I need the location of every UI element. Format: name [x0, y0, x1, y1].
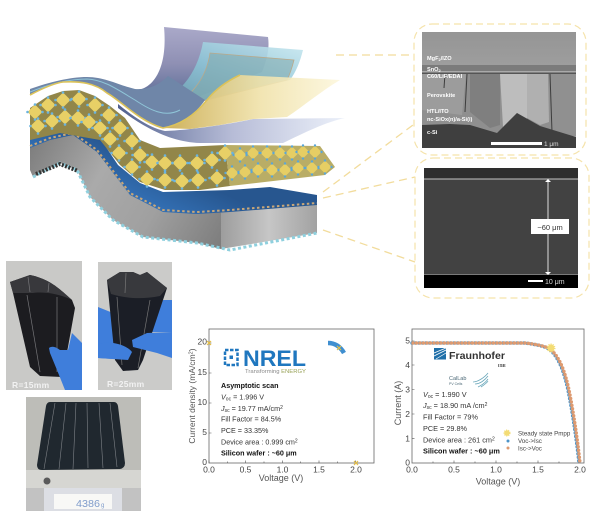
y axis labels: 5 — [405, 336, 410, 346]
layer labels: 2 — [438, 68, 442, 73]
dashed frame — [415, 158, 589, 298]
legend: Isc->Voc — [518, 446, 542, 452]
photo: wafer on weighing scale — [26, 397, 141, 511]
x axis labels: 0.0 — [406, 464, 418, 474]
measurement text — [220, 381, 298, 458]
busbars — [44, 403, 117, 469]
x axis labels: 0.5 — [240, 464, 252, 474]
layer labels: HTL/ITO — [427, 109, 449, 115]
legend: Voc->Isc — [518, 438, 542, 445]
silicon wafer end section — [221, 203, 317, 249]
thickness label: ~60 μm — [537, 223, 563, 232]
measurement text: 2 — [280, 405, 283, 411]
measurement text: PCE = 33.35% — [221, 426, 269, 435]
silicon rear textured edge — [36, 164, 78, 174]
Fraunhofer logo: ISE — [498, 363, 507, 369]
thickness arrow — [547, 180, 549, 274]
Fraunhofer logo: Fraunhofer — [449, 351, 505, 362]
chart: NREL current density vs voltage — [187, 329, 374, 483]
CalLab logo: PV Cells — [449, 382, 463, 386]
y axis labels: 2 — [405, 409, 410, 419]
ticks — [412, 341, 559, 463]
sheet: pale blue layer — [118, 104, 345, 143]
measurement text: sc — [225, 408, 230, 414]
sheet: purple top layer — [135, 27, 269, 100]
sheet: inner teal framed layer — [168, 53, 294, 108]
y axis labels: 1 — [405, 434, 410, 444]
sheet: yellow outline ribbon — [30, 75, 240, 128]
silicon bottom zigzag edge — [33, 163, 317, 250]
x axis labels — [406, 464, 586, 474]
measurement text: sc — [427, 405, 432, 411]
sheet: curved interlayers on the left — [30, 76, 205, 128]
measurement text: = 19.77 mA/cm — [230, 404, 280, 413]
measurement text: = 18.90 mA /cm — [432, 401, 485, 410]
sheet: yellow layer — [163, 75, 340, 129]
sheet: cyan layer — [150, 42, 303, 104]
x axis labels: 1.5 — [313, 464, 325, 474]
data trace — [328, 343, 344, 353]
measurement text: oc — [428, 394, 434, 400]
CalLab logo: CalLab — [449, 376, 466, 382]
NREL logo: Transforming ENERGY — [245, 369, 306, 375]
legend — [504, 430, 571, 452]
x axis title: Voltage (V) — [259, 473, 303, 483]
measurement text: J — [422, 401, 427, 410]
x axis labels: 1.0 — [490, 464, 502, 474]
y axis labels: 3 — [405, 384, 410, 394]
measurement text: oc — [226, 396, 232, 402]
y axis labels — [405, 336, 410, 468]
perovskite lattice backing right — [225, 145, 335, 186]
busbars — [117, 273, 150, 368]
bent wafer — [107, 272, 167, 371]
x axis labels: 2.0 — [350, 464, 362, 474]
display unit: g — [101, 503, 104, 509]
y axis labels — [198, 336, 207, 467]
Fraunhofer logo — [434, 348, 507, 369]
markers — [207, 341, 358, 465]
measurement text: Device area : 0.999 cm — [221, 438, 295, 446]
display housing — [44, 488, 122, 511]
textured blue layer — [30, 128, 317, 214]
layer labels: MgF — [427, 56, 438, 62]
silicon wafer left section — [30, 133, 221, 249]
measurement text: Asymptotic scan — [221, 381, 279, 390]
scale bar — [491, 142, 542, 145]
layer labels: nc-SiOx(n)/a-Si(i) — [427, 117, 473, 123]
panel: SEM wafer thickness — [415, 158, 589, 298]
blue glove front — [98, 332, 172, 360]
data trace: blue — [412, 343, 579, 463]
layer labels — [427, 56, 473, 136]
y axis title: Current (A) — [393, 381, 403, 425]
scale bar — [528, 280, 543, 282]
measurement text: PCE = 29.8% — [423, 424, 468, 433]
interlayer highlight — [30, 79, 180, 113]
x axis labels: 0.0 — [203, 464, 215, 474]
x axis labels: 0.5 — [448, 464, 460, 474]
SEM image — [422, 32, 576, 148]
legend: Steady state Pmpp — [518, 430, 571, 438]
x axis labels: 2.0 — [574, 464, 586, 474]
wafer inner surface — [107, 272, 167, 298]
layer labels: SnO — [427, 67, 438, 73]
connector dashes to SEM panels — [323, 55, 415, 262]
y axis labels: 0 — [202, 457, 207, 467]
CalLab logo — [449, 373, 488, 387]
x axis title: Voltage (V) — [476, 476, 520, 486]
layer labels: /IZO — [441, 56, 452, 62]
busbars — [27, 277, 57, 372]
measurement text — [422, 390, 500, 456]
NREL logo — [225, 346, 306, 375]
measurement text: = 1.996 V — [231, 392, 264, 402]
display reading: 4386 — [76, 499, 100, 510]
measurement text: Fill Factor = 79% — [423, 412, 478, 422]
x axis labels — [203, 464, 362, 474]
y axis labels: 15 — [198, 367, 207, 377]
measurement text: 2 — [492, 436, 495, 442]
measurement text: J — [220, 404, 225, 413]
plot frame — [209, 329, 374, 463]
x axis labels: 1.5 — [532, 464, 544, 474]
scale base — [26, 488, 141, 511]
ticks — [209, 343, 356, 463]
blue glove — [49, 333, 82, 390]
y axis title: 2 — [188, 351, 194, 354]
y axis labels: 20 — [198, 336, 207, 346]
y axis labels: 4 — [405, 360, 410, 370]
plot frame — [412, 329, 584, 463]
layer labels: 2 — [438, 57, 442, 62]
radius label: R=15mm — [12, 380, 50, 390]
dashed frame — [414, 24, 586, 155]
measurement text: Silicon wafer : ~60 μm — [221, 448, 297, 458]
NREL logo: NREL — [243, 346, 306, 371]
y axis labels: 10 — [198, 397, 207, 407]
perovskite crystal diamonds — [26, 90, 333, 190]
measurement text: V — [221, 392, 227, 402]
layer labels: c-Si — [427, 130, 438, 136]
layer labels: C60/LiF/EDAI — [427, 74, 463, 80]
panel: SEM cross-section of top cell — [414, 24, 586, 155]
steady state marker — [548, 344, 554, 352]
wafer — [37, 402, 125, 470]
measurement text: Silicon wafer : ~60 μm — [423, 446, 500, 456]
x axis labels: 1.0 — [277, 464, 289, 474]
y axis labels: 0 — [405, 458, 410, 468]
SEM image — [424, 168, 578, 288]
display — [54, 494, 112, 509]
blue glove behind — [98, 300, 172, 360]
measurement text: 2 — [295, 438, 298, 444]
layer labels: Perovskite — [427, 93, 455, 99]
wafer inner surface — [10, 275, 72, 300]
measurement text: = 1.990 V — [433, 390, 467, 399]
bent wafer — [10, 275, 75, 377]
y axis labels: 5 — [202, 427, 207, 437]
measurement text: Fill Factor = 84.5% — [221, 414, 282, 424]
photo: wafer bent at R=15mm — [6, 261, 82, 390]
panel: SEM wafer thickness: 10 μm — [545, 279, 565, 286]
scale dimple — [44, 478, 50, 484]
measurement text: Device area : 261 cm — [423, 436, 492, 444]
panel: SEM cross-section of top cell: 1 μm — [544, 141, 559, 148]
radius label: R=25mm — [107, 379, 145, 389]
photo: wafer bent at R=25mm — [98, 262, 172, 390]
silicon top zigzag edge — [30, 133, 317, 212]
measurement text: V — [423, 390, 429, 399]
perovskite lattice backing — [30, 90, 230, 190]
main illustration: flexible tandem cell layer stack — [26, 27, 345, 250]
thickness label — [531, 219, 569, 234]
measurement text: 2 — [485, 402, 488, 408]
data trace: orange — [413, 343, 580, 463]
y axis title: ) — [187, 348, 197, 351]
y axis title: Current density (mA/cm — [187, 354, 197, 444]
chart: Fraunhofer current vs voltage — [393, 329, 586, 486]
